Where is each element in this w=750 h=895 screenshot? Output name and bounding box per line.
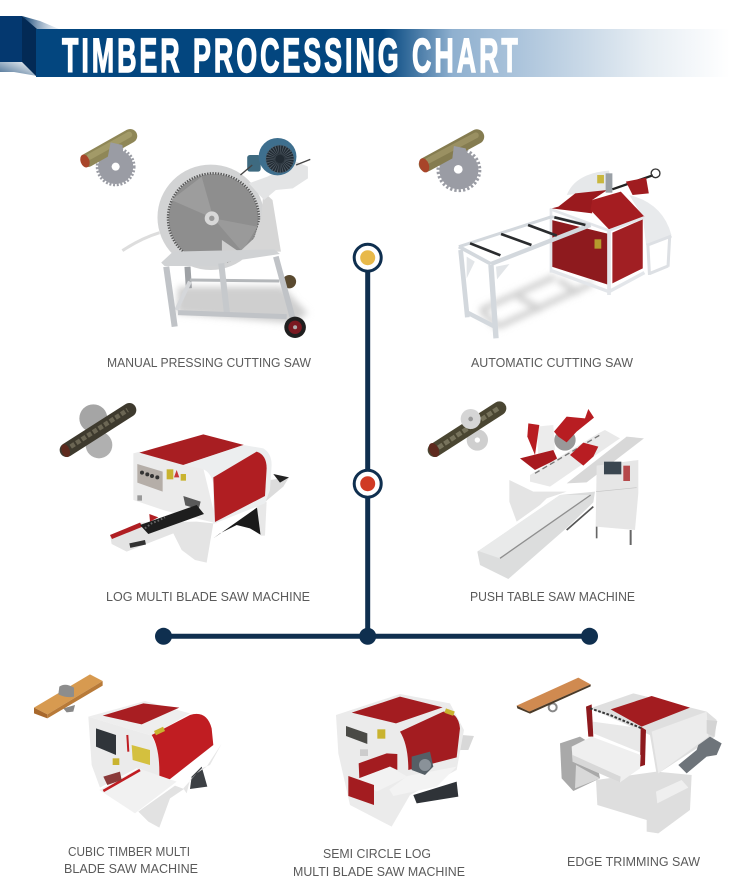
icon: timber plank [34,674,103,718]
machine photo: push table saw [477,409,644,579]
title: TIMBER PROCESSING CHART [62,30,518,83]
title banner [0,16,730,83]
icon: log and saw blade [79,135,134,185]
icon: log and saw blade [417,135,480,191]
label: EDGE TRIMMING SAW [567,854,701,869]
machine photo: manual saw [122,138,310,338]
label: PUSH TABLE SAW MACHINE [470,589,635,604]
machine photo: edge trimmer [560,693,722,833]
panel: push table saw machine [427,408,644,604]
label: MANUAL PRESSING CUTTING SAW [107,355,312,370]
panel: edge trimming saw [517,678,722,869]
label: SEMI CIRCLE LOG [323,846,431,861]
panel: manual pressing cutting saw [79,135,312,370]
icon: log and blades [60,404,129,458]
machine photo: semi circle saw [336,694,474,827]
timeline connector [155,244,598,645]
label line two: MULTI BLADE SAW MACHINE [293,864,465,879]
machine photo: multi blade saw [110,434,289,563]
icon: trimmed plank [517,678,591,714]
label line two: BLADE SAW MACHINE [64,861,198,876]
label: AUTOMATIC CUTTING SAW [471,355,634,370]
label: CUBIC TIMBER MULTI [68,844,190,859]
label: LOG MULTI BLADE SAW MACHINE [106,589,310,604]
panel: automatic cutting saw [417,135,671,370]
machine photo: cubic timber saw [88,701,222,828]
icon: log and blades [427,408,499,459]
panel: log multi blade saw machine [60,404,310,604]
panel: cubic timber multi blade saw machine [34,674,222,876]
machine photo: automatic saw [459,169,671,338]
panel: semi circle log multi blade saw machine [293,694,474,879]
